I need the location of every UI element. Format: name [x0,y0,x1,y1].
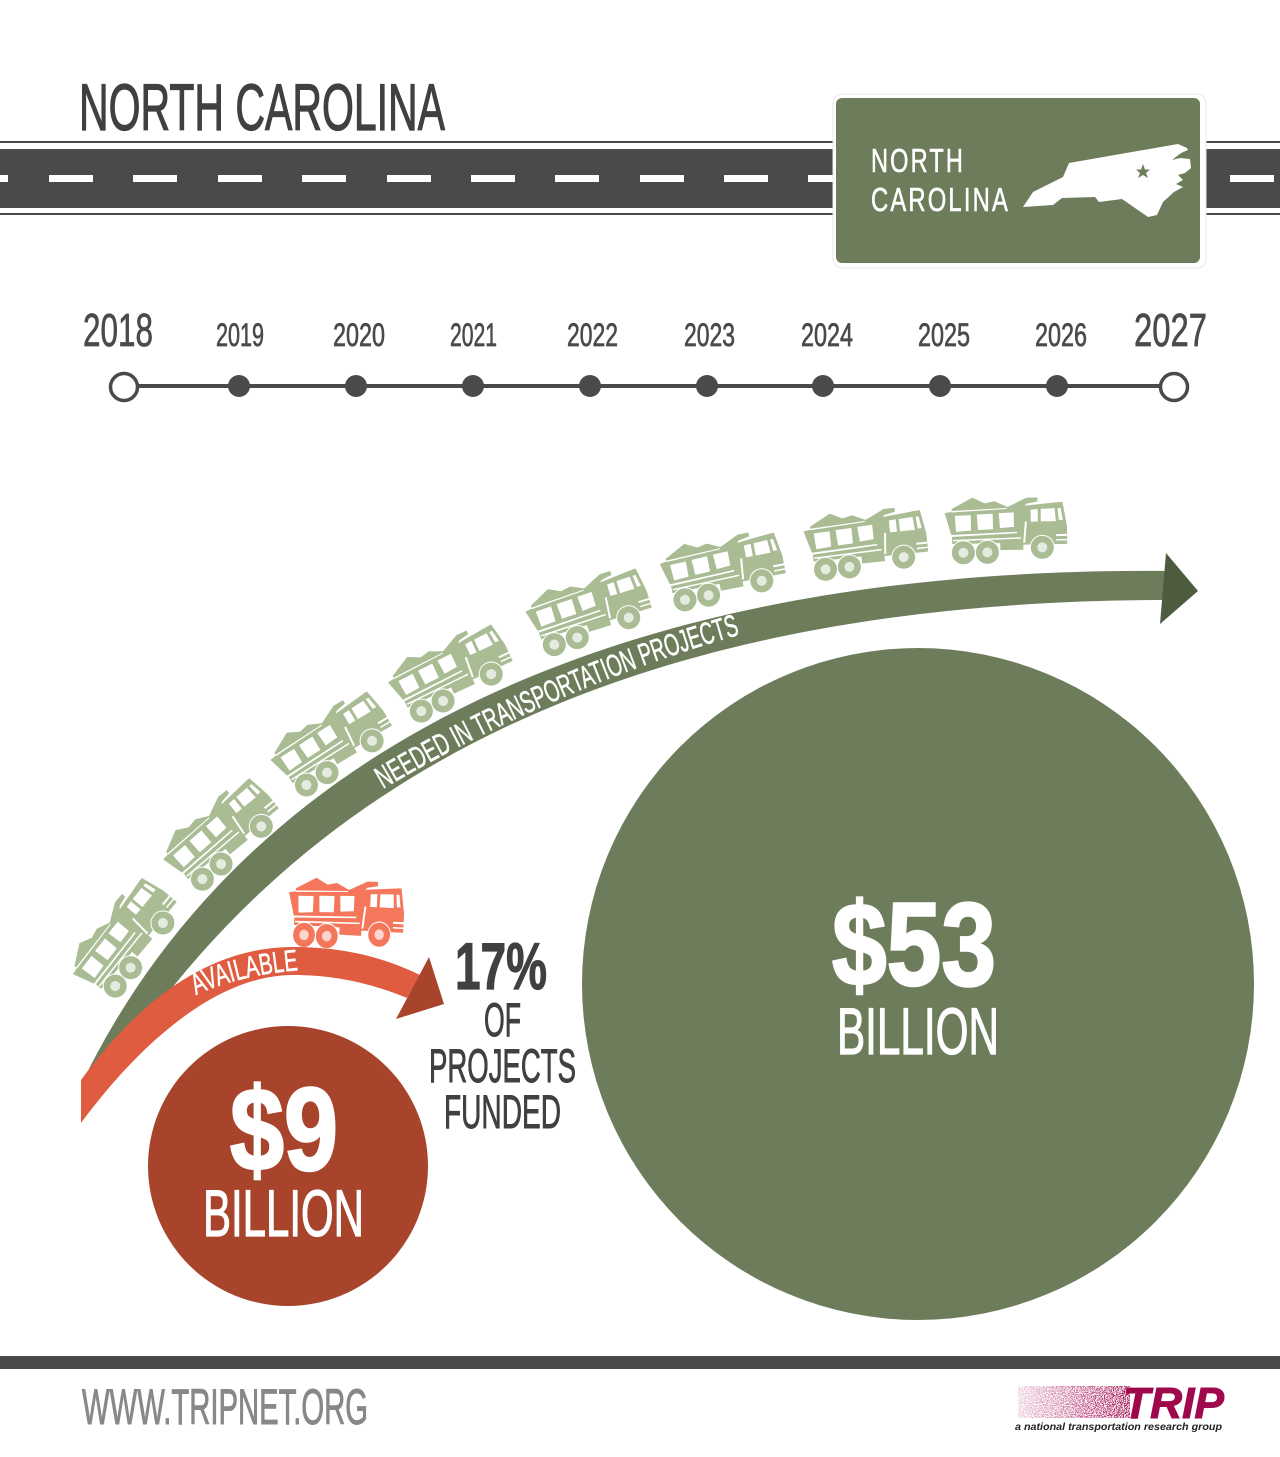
needed arrow [88,553,1198,1070]
year labels: 2024 [801,317,853,353]
sign label [871,142,1010,218]
footer website: WWW.TRIPNET.ORG [82,1379,368,1435]
TRIP logo [1015,1379,1225,1433]
TRIP logo: a national transportation research group [1015,1421,1223,1433]
green circle: $53 billion [582,648,1254,1320]
year labels: 2026 [1035,317,1087,353]
year labels: 2019 [216,317,264,353]
needed arrow label: NEEDED IN TRANSPORTATION PROJECTS [373,615,738,788]
year labels: 2023 [684,317,735,353]
year labels: 2021 [450,317,497,353]
percent funded callout [429,929,576,1138]
red circle: $9 billion: $9 [230,1064,338,1196]
green circle: $53 billion: BILLION [837,994,999,1068]
footer bar [0,1356,1280,1369]
icon: North Carolina state map [1023,144,1191,217]
sign label: NORTH [871,142,965,179]
highway road band [0,141,1280,215]
timeline track and markers [110,374,1188,400]
title: NORTH CAROLINA [79,70,445,144]
available arrow label: AVAILABLE [192,950,298,996]
sign label: CAROLINA [871,181,1010,218]
TRIP logo: TRIP [1123,1379,1225,1428]
available arrow [81,947,444,1123]
year labels: 2022 [567,317,618,353]
red circle: $9 billion [148,1026,428,1306]
percent funded callout: 17% [455,929,547,1003]
green circle: $53 billion: $53 [832,879,996,1011]
red truck [286,876,406,953]
year labels: 2018 [83,304,153,356]
percent funded callout: PROJECTS [429,1039,576,1092]
year labels: 2025 [918,317,970,353]
green trucks row [62,496,1068,1008]
highway sign [833,94,1206,268]
year labels: 2020 [333,317,385,353]
red circle: $9 billion: BILLION [203,1176,364,1250]
year labels [83,304,1207,356]
percent funded callout: OF [484,993,521,1046]
year labels: 2027 [1134,304,1207,356]
timeline [83,304,1207,400]
percent funded callout: FUNDED [444,1085,561,1138]
